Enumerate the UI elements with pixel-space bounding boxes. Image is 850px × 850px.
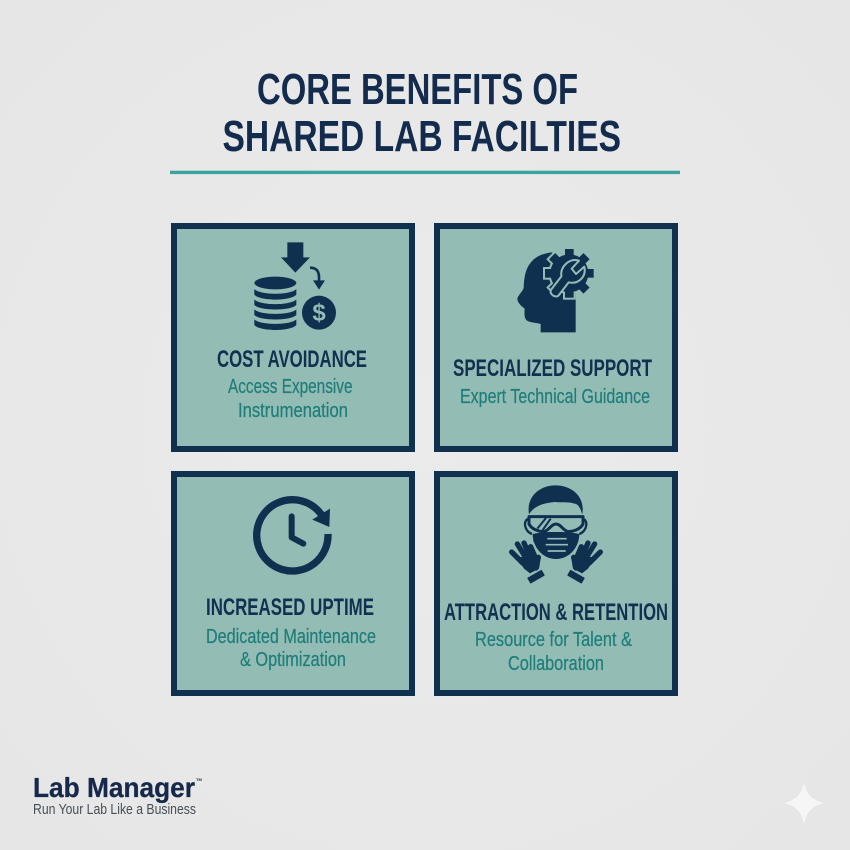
icon: sparkle star xyxy=(784,783,824,824)
description: Expert Technical Guidance xyxy=(460,386,650,408)
description: Access Expensive xyxy=(228,376,352,398)
heading: SPECIALIZED SUPPORT xyxy=(453,355,652,382)
description xyxy=(228,376,352,422)
description: Collaboration xyxy=(508,653,604,675)
icon: clock with circular arrow xyxy=(257,500,330,571)
description: Resource for Talent & xyxy=(475,629,633,651)
panel: attraction and retention xyxy=(437,474,675,693)
logo: Lab Manager xyxy=(33,772,202,818)
panel: specialized support xyxy=(437,226,675,449)
icon: coins, down arrow and dollar xyxy=(254,242,336,330)
card background xyxy=(437,226,675,449)
card background xyxy=(437,474,675,693)
title rule xyxy=(170,171,680,174)
title: CORE BENEFITS OF xyxy=(257,65,578,114)
right glove xyxy=(567,543,600,584)
logo: Lab Manager: Lab Manager xyxy=(33,772,195,803)
description: Dedicated Maintenance xyxy=(206,626,376,648)
logo: Lab Manager: Run Your Lab Like a Business xyxy=(33,802,196,818)
description xyxy=(475,629,633,675)
icon: dollar sign: $ xyxy=(312,300,326,326)
left glove xyxy=(512,543,545,584)
logo: Lab Manager: TM xyxy=(196,777,202,782)
card background xyxy=(174,226,412,449)
card background xyxy=(174,474,412,693)
description xyxy=(206,626,376,671)
title xyxy=(222,65,621,161)
heading: INCREASED UPTIME xyxy=(206,594,374,621)
description: Instrumenation xyxy=(238,400,348,422)
heading: COST AVOIDANCE xyxy=(217,346,367,373)
title: SHARED LAB FACILTIES xyxy=(222,112,621,161)
icon: head with gear and wrench xyxy=(517,249,594,332)
icon: person with goggles, mask and gloves xyxy=(512,485,600,584)
heading: ATTRACTION & RETENTION xyxy=(444,599,668,626)
panel: cost avoidance xyxy=(174,226,412,449)
description: & Optimization xyxy=(240,649,346,671)
panel: increased uptime xyxy=(174,474,412,693)
